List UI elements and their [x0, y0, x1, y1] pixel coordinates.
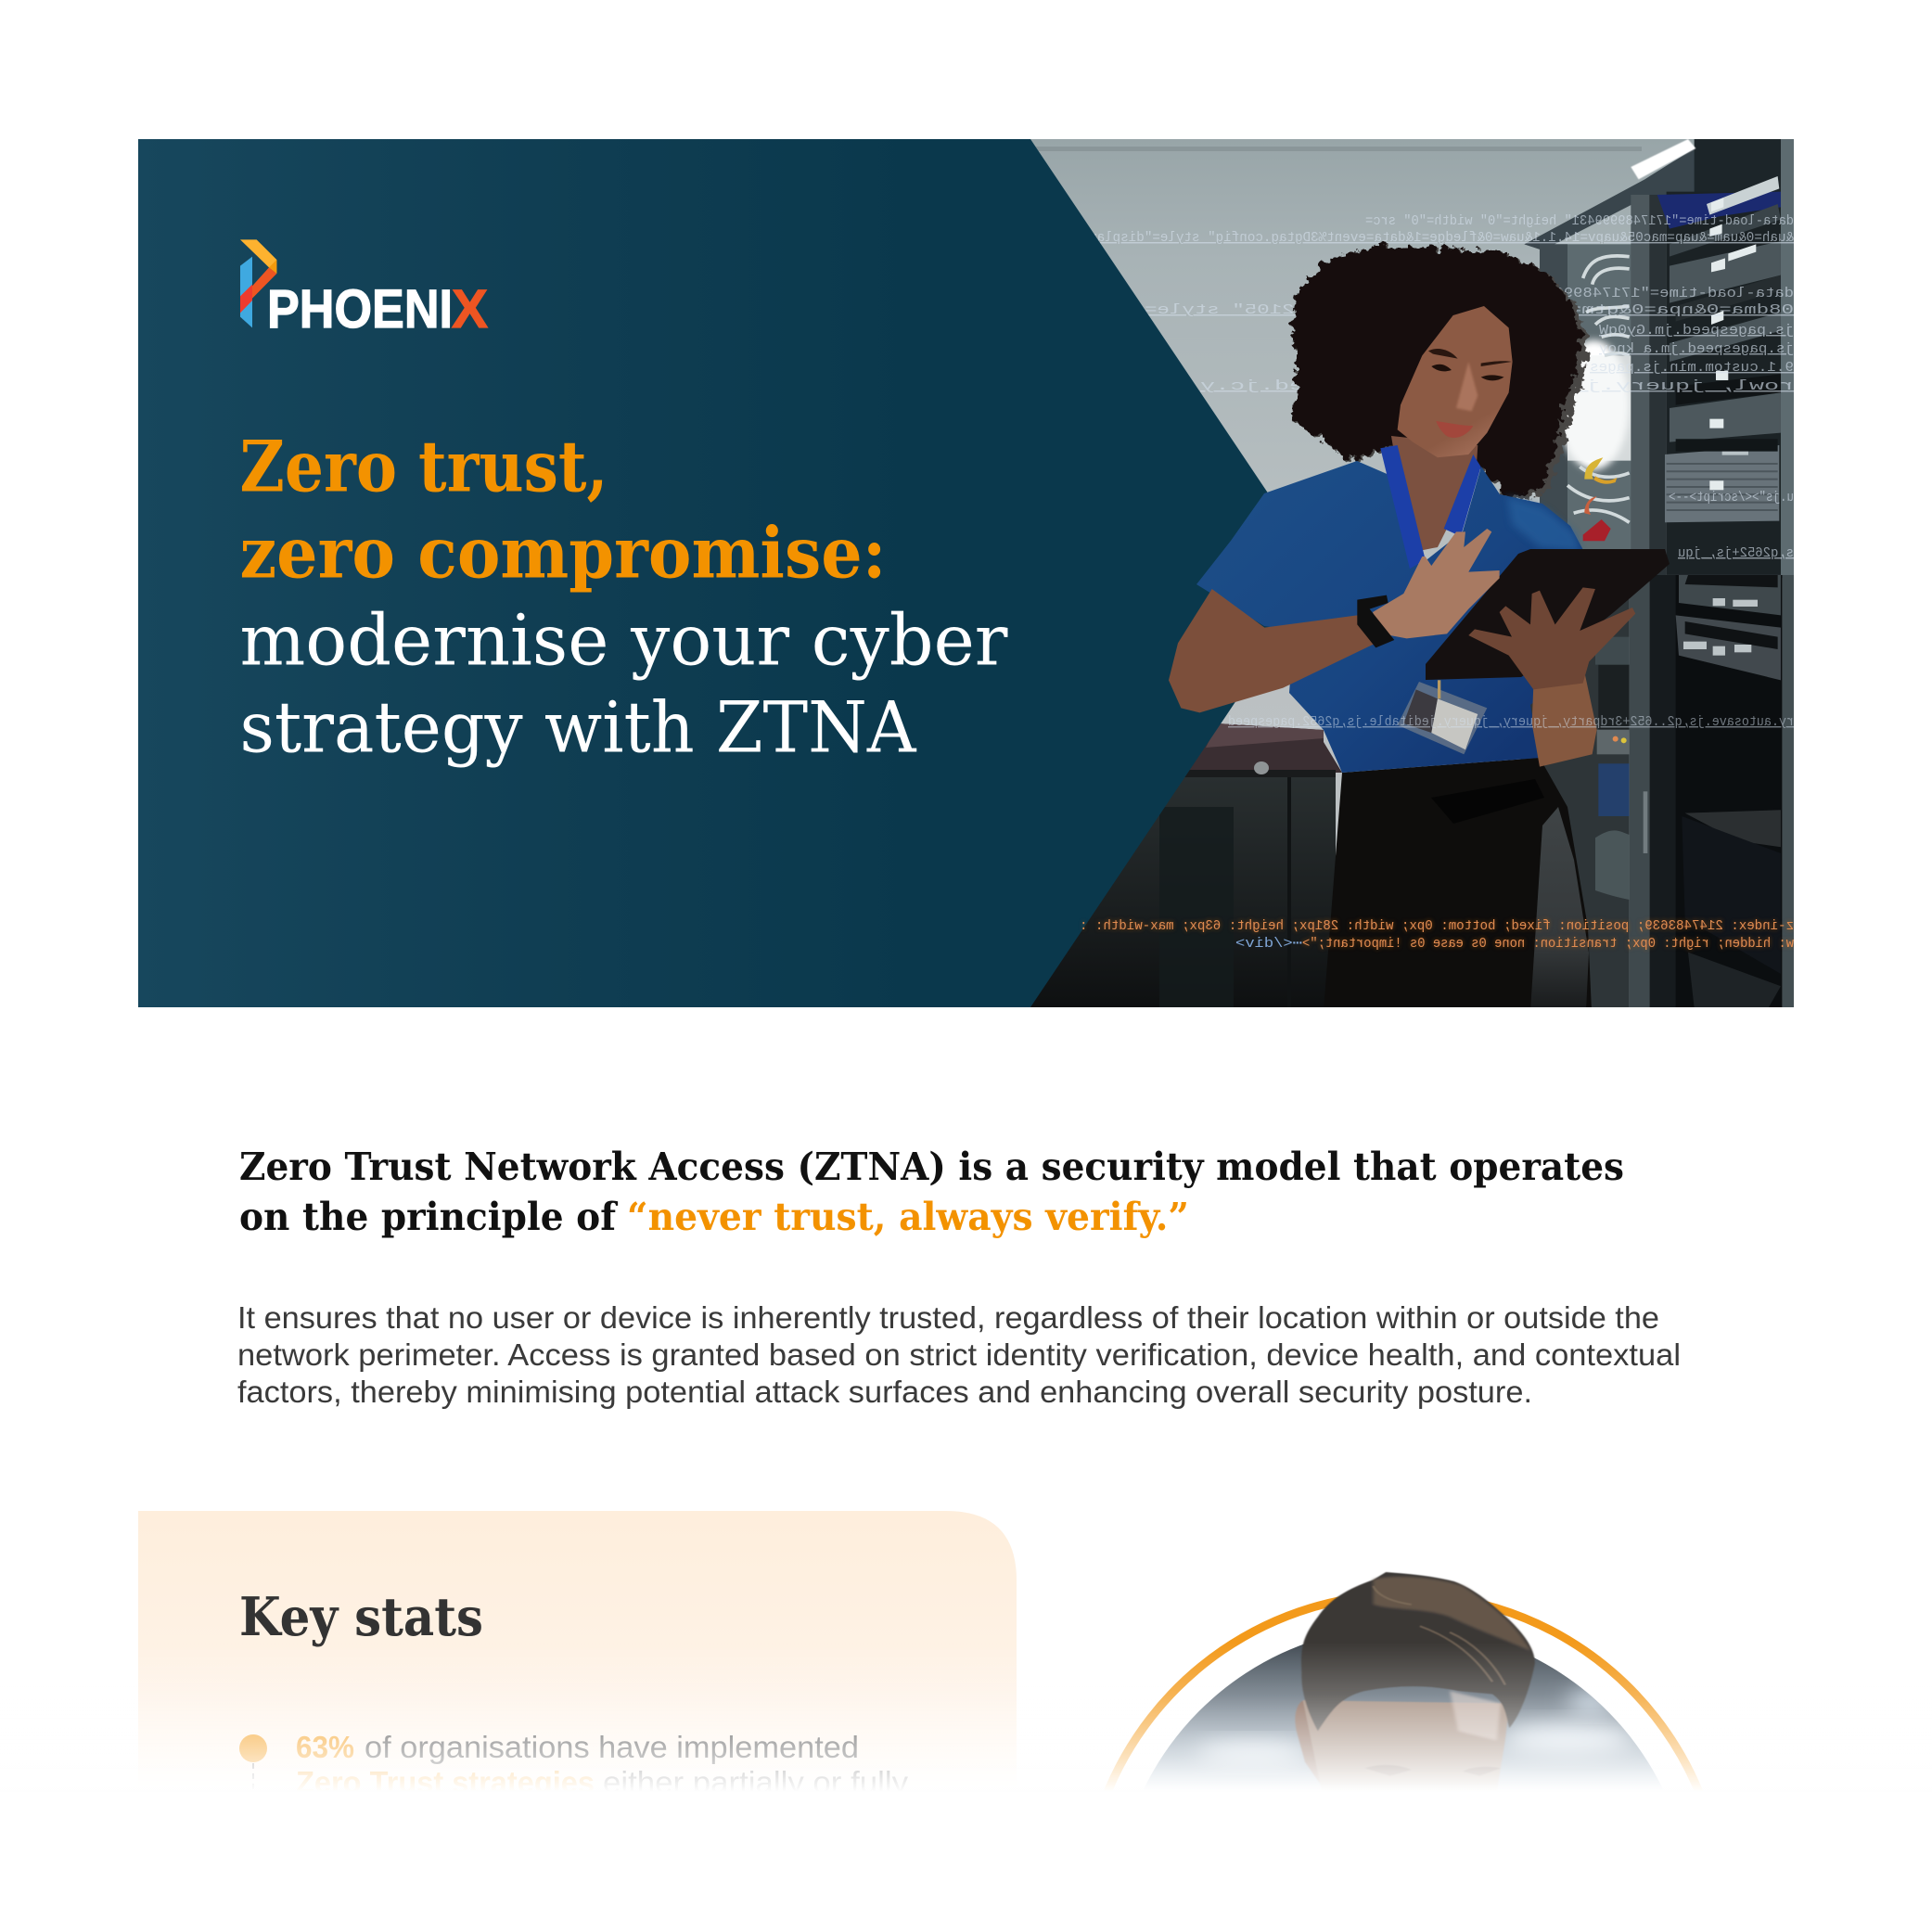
intro body text: factors, thereby minimising potential attack surfaces and enhancing overall security posture.: [237, 1375, 1532, 1409]
orange arc: [1105, 1594, 1702, 1799]
face: [1398, 306, 1513, 457]
right hand fingers: [1468, 587, 1635, 689]
server rack upper: [1524, 139, 1797, 578]
code overlay: bottom text: w: hidden; right: 0px; transition: none 0s ease 0s !important;">: [1302, 937, 1794, 952]
id badge: [1398, 680, 1487, 754]
logo mark: [240, 239, 276, 327]
desk and cabinet: [1020, 723, 1342, 1011]
key stats heading: Key stats: [239, 1586, 483, 1648]
facial features: [1428, 349, 1512, 438]
code overlay: grey text lines: js.pagespeed.jm.Gy0qW: [1599, 324, 1794, 339]
shirt shoulder highlight: [1507, 496, 1580, 552]
hero title: Zero trust,: [239, 425, 608, 508]
logo: Phoenix: [240, 239, 488, 339]
shirt: [1196, 461, 1597, 773]
hero banner: [138, 139, 1799, 1011]
bent arm: [1169, 589, 1375, 712]
stat text: Zero Trust strategies: [296, 1765, 595, 1799]
lanyard: [1380, 445, 1481, 569]
code overlay: grey text lines: u.js"></script>-->: [1669, 491, 1794, 505]
intro heading: on the principle of: [239, 1195, 618, 1239]
man's head: [1295, 1572, 1535, 1793]
stat text: of organisations have implemented: [365, 1730, 859, 1764]
intro heading: [239, 1145, 1624, 1239]
stat text: either partially or fully: [603, 1765, 909, 1799]
code overlay: grey text lines: data-load-time="1717489999431" height="0" width="0" src=: [1365, 214, 1794, 229]
code overlay: grey text lines: &uah=0&uam=&uap=mac05&uapv=14.1.1&uaw=0&fledge=1&data=event%3Dgtag.config" style="display: [1089, 231, 1794, 246]
portrait with orange arc: [1105, 1572, 1702, 1799]
code overlay: grey text lines: 9.1.custom.min.js.pages: [1590, 361, 1794, 376]
logo: Phoenix: X: [452, 279, 488, 339]
intro body text: [237, 1300, 1681, 1409]
intro body text: It ensures that no user or device is inherently trusted, regardless of their location within or outside the: [237, 1300, 1659, 1335]
code overlay: grey text lines: js.pagespeed.jm.a_knoy: [1599, 342, 1794, 357]
intro heading: “never trust, always verify.”: [627, 1195, 1189, 1239]
code overlay: grey text lines: 08dma=0&npa=0&gtm=3813131388&auid=1156772105" style=: [1145, 303, 1794, 318]
hair: [1292, 246, 1581, 498]
code overlay: grey text lines: s,q2652+js,_jqu: [1678, 546, 1794, 561]
code overlay: bottom text: ⋯</div>: [1235, 937, 1302, 952]
stat text: 63%: [296, 1730, 354, 1764]
code overlay: grey text lines: data-load-time="1717489990431: [1516, 287, 1794, 301]
code overlay: bottom text: z-index: 2147483639; position: fixed; bottom: 0px; width: 281px; height: 63px; max-width: :: [1080, 919, 1794, 934]
hero title: modernise your cyber: [239, 599, 1008, 681]
hero photo: wall: [1020, 139, 1799, 1011]
code overlay: bottom text: ry.autosave.js,q2..652+3rdparty,_jquery,_jquery.jeditable.js,q2652.pagespeed: [1228, 715, 1794, 730]
intro body text: network perimeter. Access is granted based on strict identity verification, device health, and contextual: [237, 1337, 1681, 1372]
portrait background circle: [1147, 1644, 1658, 1783]
left hand: [1357, 529, 1500, 647]
stat bullet: [239, 1734, 267, 1799]
server rack lower: [1521, 575, 1797, 1008]
tablet: [1426, 549, 1670, 680]
code overlay: grey text lines: rowl,_jquery.j..ip.min.js.pagespeed.jc.y: [1199, 379, 1794, 394]
stat text: [296, 1730, 909, 1799]
hero title: strategy with ZTNA: [239, 686, 917, 768]
watch: [1357, 595, 1394, 647]
belt: [1431, 779, 1544, 824]
right forearm and hand: [1532, 665, 1597, 767]
hero title: [239, 425, 1008, 768]
intro heading: Zero Trust Network Access (ZTNA) is a security model that operates: [239, 1145, 1624, 1189]
panel: key stats: [138, 1511, 1017, 1799]
logo wordmark: PHOENI: [267, 279, 453, 339]
teal diagonal shape: [138, 139, 1322, 1007]
hair rim: [1294, 247, 1588, 502]
code overlay: bottom text: [1080, 715, 1794, 952]
ceiling pipe: [1030, 147, 1642, 151]
neck and chest: [1380, 306, 1513, 569]
panel background: [138, 1511, 1017, 1799]
trouser highlight: [1530, 807, 1589, 1011]
trousers: [1324, 758, 1592, 1011]
hero title: zero compromise:: [239, 512, 887, 594]
bottom white fade: [0, 1642, 1932, 1932]
code overlay: grey text lines: [1089, 214, 1794, 561]
woman with tablet: [1169, 246, 1670, 1011]
